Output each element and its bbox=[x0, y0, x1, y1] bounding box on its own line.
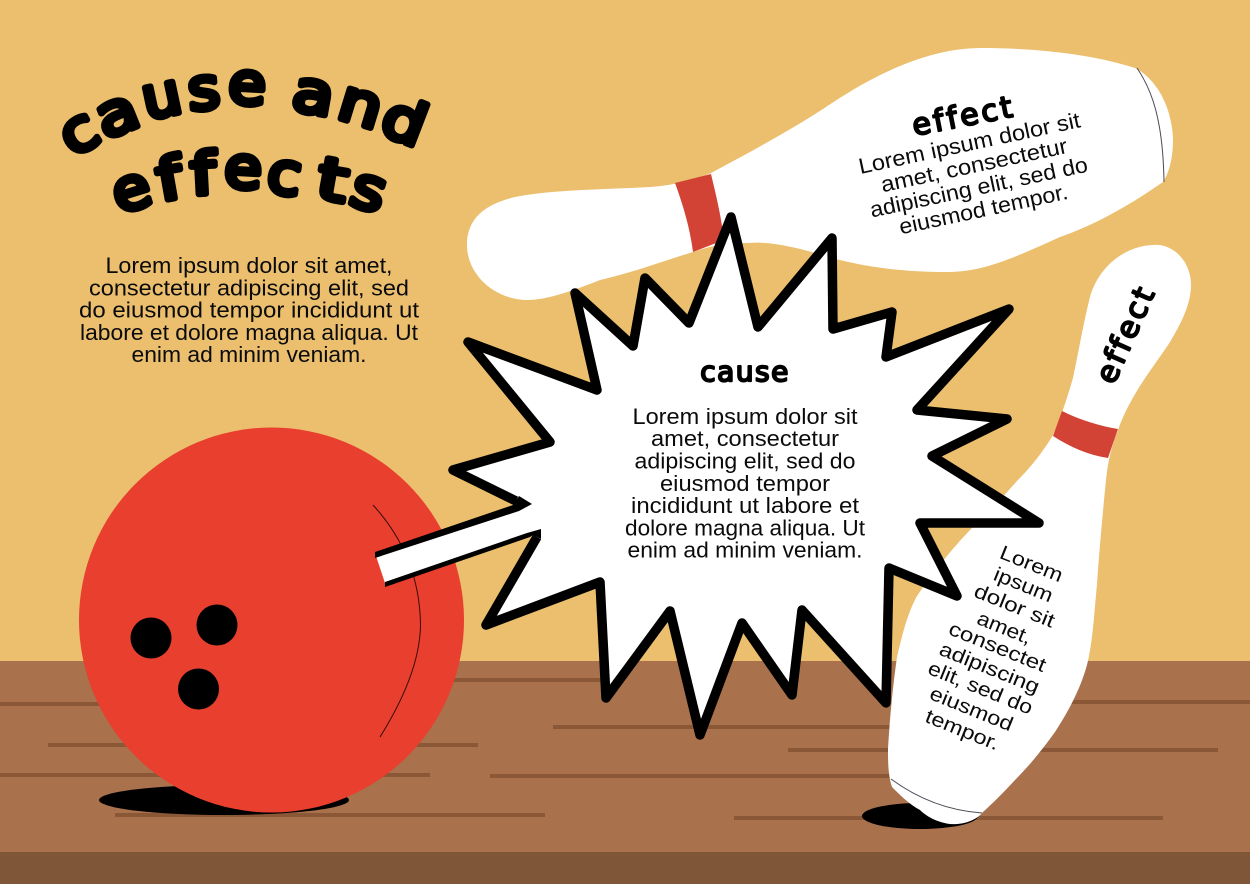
text: effect right: adipiscing bbox=[936, 638, 1043, 698]
intro text: labore et dolore magna aliqua. Ut bbox=[80, 320, 418, 345]
text: effect top: amet, consectetur bbox=[879, 133, 1070, 197]
title: e bbox=[223, 134, 264, 204]
intro text: enim ad minim veniam. bbox=[132, 342, 366, 367]
icon: finger holes bbox=[130, 604, 238, 710]
text: effect right bbox=[922, 542, 1066, 755]
text: cause: eiusmod tempor bbox=[660, 471, 830, 496]
intro text: Lorem ipsum dolor sit amet, bbox=[106, 253, 392, 278]
text: effect right: dolor sit bbox=[971, 580, 1058, 633]
text: cause: incididunt ut labore et bbox=[631, 493, 859, 518]
intro text: consectetur adipiscing elit, sed bbox=[89, 276, 409, 300]
title: d bbox=[373, 82, 436, 161]
title: s bbox=[185, 55, 222, 125]
floor bbox=[0, 661, 1250, 884]
title: u bbox=[136, 60, 187, 134]
bowling ball bbox=[79, 428, 464, 812]
title: e bbox=[103, 152, 159, 228]
intro text: do eiusmod tempor incididunt ut bbox=[79, 298, 419, 322]
effect pin top bbox=[467, 48, 1173, 300]
title: s bbox=[343, 152, 395, 227]
text: effect top: eiusmod tempor. bbox=[897, 179, 1070, 239]
text: effect right: elit, sed do bbox=[925, 657, 1036, 719]
callout: cause starburst bbox=[375, 217, 1039, 735]
title: t bbox=[312, 145, 353, 216]
title: a bbox=[85, 74, 148, 152]
title: c bbox=[263, 139, 306, 211]
text: cause: Lorem ipsum dolor sit bbox=[632, 404, 858, 429]
text: effect right: tempor. bbox=[922, 706, 1003, 755]
text: effect right: Lorem bbox=[997, 542, 1066, 587]
text: cause: dolore magna aliqua. Ut bbox=[625, 516, 865, 540]
title: a bbox=[288, 56, 340, 130]
intro text bbox=[79, 253, 419, 367]
callout pointer bbox=[375, 496, 541, 587]
text: effect right: consectet bbox=[945, 618, 1050, 677]
effect pin right shadow bbox=[862, 803, 978, 829]
text: cause: adipiscing elit, sed do bbox=[634, 448, 856, 474]
title: n bbox=[331, 66, 391, 143]
text: effect right: eiusmod bbox=[926, 683, 1016, 736]
text: cause: enim ad minim veniam. bbox=[628, 538, 862, 562]
text: cause bbox=[625, 404, 865, 562]
title: c bbox=[46, 94, 110, 170]
text: effect right: amet, bbox=[974, 608, 1035, 649]
effect pin right bbox=[888, 245, 1191, 824]
title: f bbox=[189, 141, 218, 209]
title bbox=[46, 50, 436, 228]
text: effect top: adipiscing elit, sed do bbox=[868, 152, 1090, 222]
heading: cause: cause bbox=[700, 355, 790, 388]
text: cause: amet, consectetur bbox=[651, 426, 839, 451]
ball shadow bbox=[99, 785, 349, 815]
heading: effect: effect bbox=[1089, 279, 1164, 389]
title: e bbox=[227, 50, 268, 120]
title: f bbox=[152, 145, 189, 215]
text: effect top: Lorem ipsum dolor sit bbox=[856, 107, 1082, 179]
text: effect right: ipsum bbox=[990, 564, 1056, 607]
text: effect top bbox=[856, 107, 1097, 245]
heading: effect: effect bbox=[909, 89, 1018, 144]
